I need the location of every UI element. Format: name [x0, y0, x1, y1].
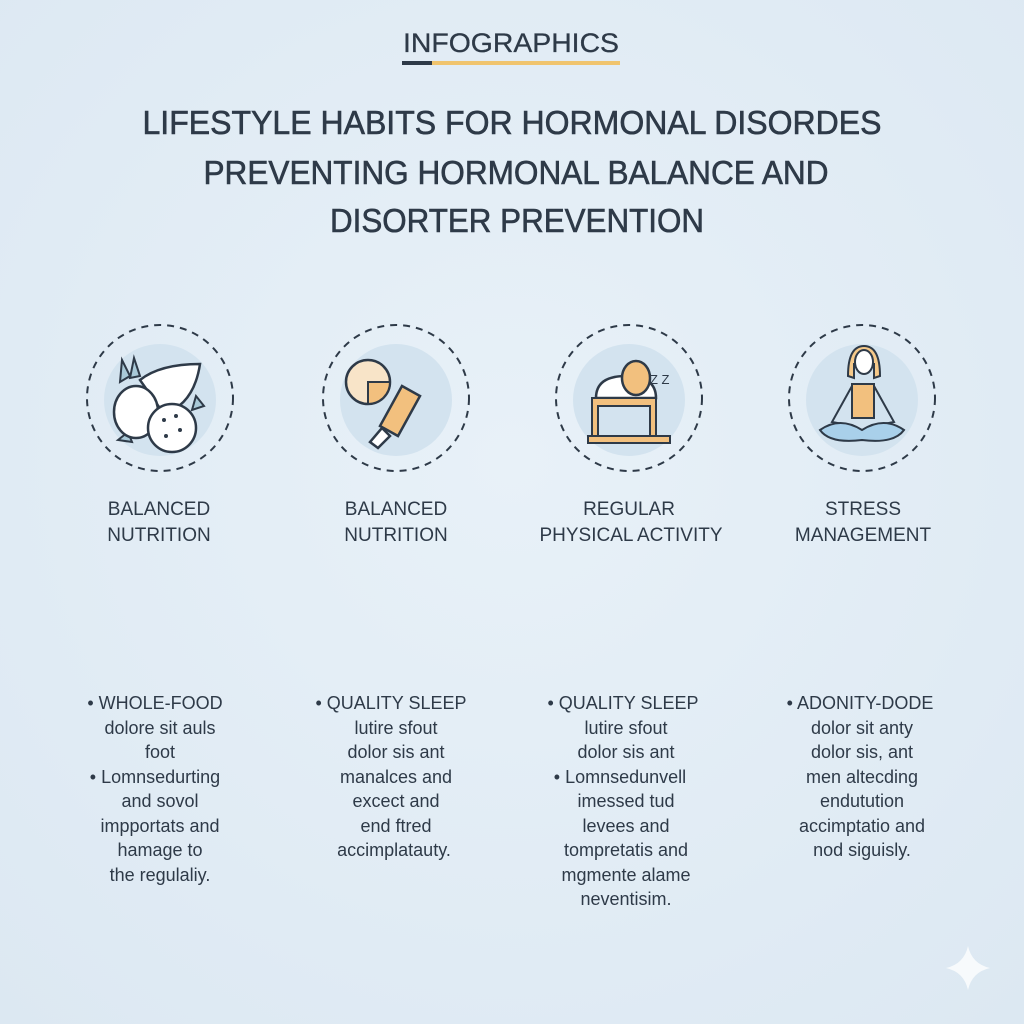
- column 3 text: • Lomnsedunvell: [554, 767, 686, 787]
- column 3 text: mgmente alame: [561, 865, 691, 885]
- habit labels: PHYSICAL ACTIVITY: [539, 525, 723, 546]
- column 4 text: dolor sis, ant: [811, 742, 913, 762]
- column 3 text: neventisim.: [580, 889, 672, 909]
- title: LIFESTYLE HABITS FOR HORMONAL DISORDES: [142, 104, 882, 141]
- column 2 text: lutire sfout: [354, 718, 438, 738]
- column 3 text: tompretatis and: [564, 840, 688, 860]
- kicker: infographics: INFOGRAPHICS: [403, 28, 619, 58]
- column 3 text: imessed tud: [577, 791, 675, 811]
- column 1 text: and sovol: [121, 791, 199, 811]
- habit labels: REGULAR: [583, 499, 675, 520]
- column 2 text: accimplatauty.: [337, 840, 451, 860]
- column 4 text: men altecding: [806, 767, 918, 787]
- column 4 text: endutution: [820, 791, 904, 811]
- habit labels: STRESS: [825, 499, 901, 520]
- column 2 text: manalces and: [340, 767, 452, 787]
- habit labels: [107, 499, 931, 546]
- column 2 text: end ftred: [360, 816, 432, 836]
- column 1 text: impportats and: [100, 816, 220, 836]
- title: PREVENTING HORMONAL BALANCE AND: [204, 154, 828, 191]
- column 4 text: [787, 693, 933, 860]
- icon: sleep: Z Z: [650, 372, 670, 387]
- column 3 text: [547, 693, 699, 909]
- icon: sleep: [556, 325, 702, 471]
- column 3 text: • QUALITY SLEEP: [547, 693, 699, 713]
- column 3 text: levees and: [582, 816, 670, 836]
- title: DISORTER PREVENTION: [330, 202, 704, 239]
- title: [142, 104, 882, 239]
- column 2 text: • QUALITY SLEEP: [315, 693, 467, 713]
- column 2 text: [315, 693, 467, 860]
- habit labels: NUTRITION: [107, 525, 211, 546]
- icon: meditation: [789, 325, 935, 471]
- column 2 text: excect and: [352, 791, 440, 811]
- icon: nutrition: [87, 325, 233, 471]
- column 1 text: foot: [145, 742, 175, 762]
- column 3 text: lutire sfout: [584, 718, 668, 738]
- column 4 text: • ADONITY-DODE: [787, 693, 933, 713]
- icon: balanced nutrition 2: [323, 325, 469, 471]
- column 1 text: the regulaliy.: [110, 865, 210, 885]
- column 3 text: dolor sis ant: [577, 742, 675, 762]
- column 4 text: accimptatio and: [799, 816, 925, 836]
- icon: sparkle: [946, 946, 990, 990]
- habit labels: BALANCED: [108, 499, 210, 520]
- column 2 text: dolor sis ant: [347, 742, 445, 762]
- column 4 text: dolor sit anty: [811, 718, 913, 738]
- column 1 text: • Lomnsedurting: [90, 767, 220, 787]
- habit labels: BALANCED: [345, 499, 447, 520]
- habit labels: NUTRITION: [344, 525, 448, 546]
- column 1 text: • WHOLE-FOOD: [87, 693, 223, 713]
- habit labels: MANAGEMENT: [795, 525, 931, 546]
- column 1 text: hamage to: [117, 840, 203, 860]
- column 4 text: nod siguisly.: [813, 840, 911, 860]
- column 1 text: dolore sit auls: [104, 718, 216, 738]
- column 1 text: [87, 693, 223, 885]
